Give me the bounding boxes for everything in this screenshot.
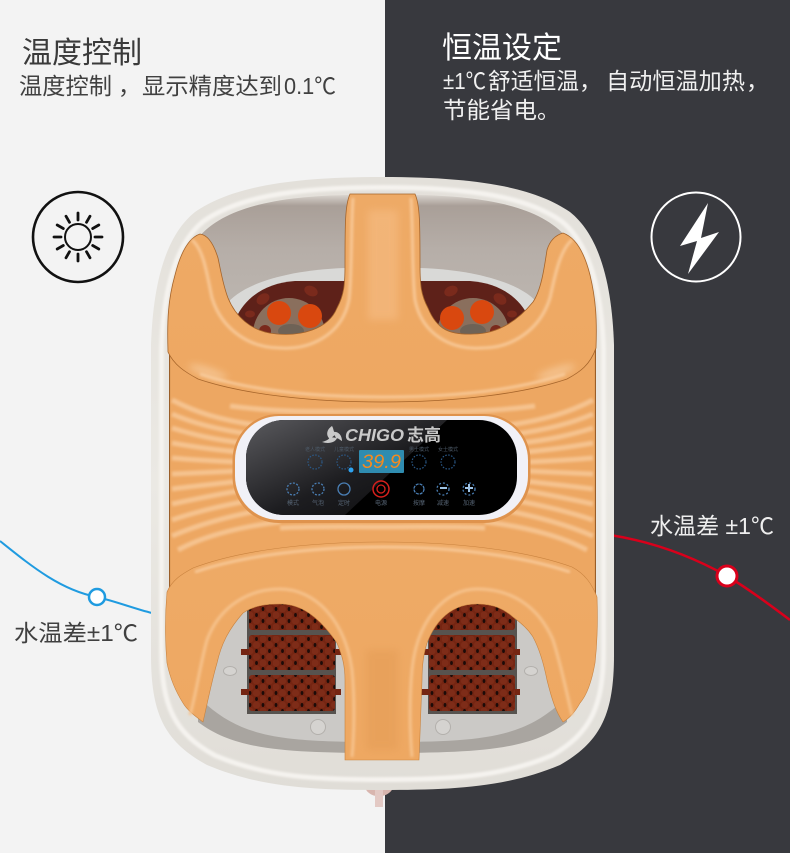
text block: temperature control description xyxy=(19,73,336,99)
lower well xyxy=(198,600,567,753)
bottom page strip xyxy=(0,853,790,855)
text block: temperature control description: 温度控制 xyxy=(19,73,112,99)
inner arch highlights xyxy=(190,589,572,757)
text block: constant temperature description: ±1℃ xyxy=(443,68,486,94)
icon: sun xyxy=(33,192,123,282)
bottom row function buttons: 定时 xyxy=(338,499,350,507)
red temperature curve xyxy=(610,535,790,620)
top row mode buttons xyxy=(305,446,458,472)
blue temperature curve xyxy=(0,541,152,613)
rollers left xyxy=(249,604,335,711)
icon: lightning bolt xyxy=(652,192,740,282)
shell highlight contour xyxy=(161,187,604,780)
panel frame xyxy=(232,414,530,523)
label: right water temperature difference: 水温差 ±1℃ xyxy=(650,513,774,539)
blue curve marker xyxy=(89,589,105,605)
text block: constant temperature description: 节能省电 xyxy=(443,97,537,123)
upper well xyxy=(198,195,567,370)
bottom row function buttons: 模式 xyxy=(287,499,299,507)
heading: temperature control: 温度控制 xyxy=(22,37,142,70)
text block: constant temperature description: 。 xyxy=(537,97,560,123)
outer shell xyxy=(151,177,614,790)
brand logo: 志高 xyxy=(407,425,441,445)
left background panel xyxy=(0,0,385,853)
temperature display: 39.9 xyxy=(362,452,401,473)
lid corner gloss xyxy=(188,362,576,382)
band side edges xyxy=(170,345,596,600)
right background panel xyxy=(385,0,790,853)
brown massage plate left xyxy=(236,281,345,350)
power button xyxy=(373,481,389,497)
roller shadow left xyxy=(247,604,336,714)
brown massage plate right xyxy=(420,281,529,350)
top row mode buttons: 老人模式 xyxy=(305,446,325,453)
text block: constant temperature description: 舒适恒温 xyxy=(488,68,579,94)
heading: constant temperature setting: 恒温设定 xyxy=(442,32,562,65)
roller axles xyxy=(241,649,520,695)
black glass xyxy=(246,420,517,515)
center post shade xyxy=(366,650,398,750)
lid top highlight xyxy=(195,547,570,572)
red curve marker xyxy=(717,566,737,586)
top row mode buttons: 男士模式 xyxy=(409,446,429,453)
massage ring left xyxy=(253,298,325,370)
top row mode buttons: 女士模式 xyxy=(438,446,458,453)
text block: temperature control description: ， xyxy=(118,73,141,99)
massage nodes xyxy=(245,284,517,337)
rim highlights xyxy=(192,198,572,397)
lower lid xyxy=(166,542,597,760)
label: left water temperature difference: 水温差±1℃ xyxy=(14,620,138,646)
brand logo: CHIGO xyxy=(345,425,404,445)
top row mode buttons: 儿童模式 xyxy=(334,446,354,453)
brand logo xyxy=(322,425,441,445)
text block: constant temperature description: ， xyxy=(746,68,769,94)
rollers right xyxy=(429,604,515,711)
bottom row function buttons: 加速 xyxy=(463,499,475,507)
well bumps xyxy=(224,666,538,734)
glass reflection xyxy=(246,420,447,515)
bottom row function buttons: 按摩 xyxy=(413,499,425,507)
text block: constant temperature description: ， xyxy=(579,68,602,94)
bottom row function buttons xyxy=(287,481,475,507)
latch at bottom xyxy=(365,788,393,807)
middle striped band xyxy=(168,345,597,605)
orange balls xyxy=(267,300,494,330)
bottom row function buttons: 电源 xyxy=(375,499,387,507)
center post highlight xyxy=(368,210,398,320)
control panel xyxy=(232,414,530,523)
upper lid xyxy=(168,194,596,402)
text block: temperature control description: 显示精度达到 xyxy=(142,73,282,99)
bottom row function buttons: 气泡 xyxy=(312,499,324,507)
text block: temperature control description: 0.1℃ xyxy=(284,73,336,99)
white plate xyxy=(226,268,539,350)
text block: constant temperature description xyxy=(443,68,769,123)
bottom row function buttons: 减速 xyxy=(437,499,449,507)
massage ring right xyxy=(437,298,509,370)
foot bath product xyxy=(151,177,614,807)
text block: constant temperature description: 自动恒温加热 xyxy=(606,68,745,94)
roller shadow right xyxy=(428,604,517,714)
